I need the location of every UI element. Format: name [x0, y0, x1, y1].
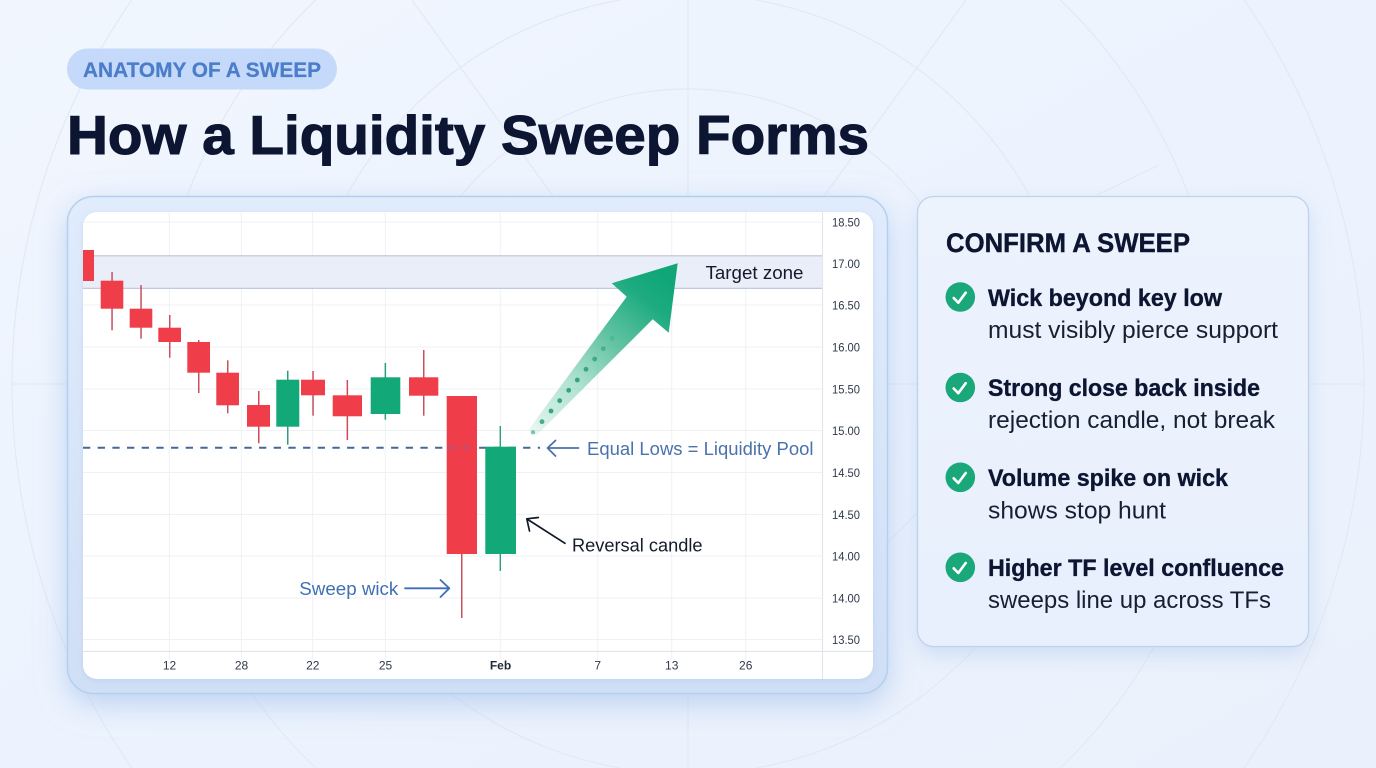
price axis labels: 18.50 [832, 215, 860, 229]
checklist item: volume spike on wick [946, 462, 1229, 524]
checklist item: strong close back inside [946, 373, 1276, 434]
date axis labels: Feb [490, 658, 511, 672]
label: target zone: Target zone [706, 262, 804, 283]
chart plot [83, 212, 873, 679]
checklist item: strong close back inside: Strong close back inside [988, 375, 1260, 402]
date axis labels: 7 [594, 658, 601, 672]
card frame [68, 196, 888, 694]
checklist item: higher TF level confluence [946, 552, 1284, 614]
arrow: projected move to target zone [528, 263, 678, 435]
price axis labels: 16.50 [832, 298, 860, 312]
price axis labels [832, 215, 860, 647]
checklist item: higher TF level confluence: sweeps line up across TFs [988, 587, 1271, 614]
callout: equal lows liquidity pool: Equal Lows = Liquidity Pool [587, 438, 814, 459]
date axis labels [163, 658, 753, 672]
panel background [918, 196, 1308, 646]
date axis labels: 12 [163, 658, 176, 672]
date axis labels: 28 [235, 658, 248, 672]
price axis labels: 13.50 [832, 633, 860, 647]
price axis labels: 14.50 [832, 508, 860, 522]
checklist item: volume spike on wick: shows stop hunt [988, 497, 1166, 524]
date axis labels: 25 [379, 658, 392, 672]
price axis labels: 14.00 [832, 549, 860, 563]
price axis labels: 14.50 [832, 466, 860, 480]
date axis labels: 22 [306, 658, 320, 672]
tag pill: anatomy of a sweep: ANATOMY OF A SWEEP [83, 59, 321, 82]
price axis labels: 16.00 [832, 340, 860, 354]
candlesticks [83, 250, 516, 618]
price axis labels: 15.00 [832, 424, 860, 438]
checklist item: strong close back inside: rejection candle, not break [988, 407, 1276, 434]
axis lines [83, 212, 873, 679]
checklist item: wick beyond key low: must visibly pierce support [988, 317, 1278, 344]
date axis labels: 13 [665, 658, 679, 672]
date axis labels: 26 [739, 658, 753, 672]
panel heading: CONFIRM A SWEEP [946, 228, 1190, 258]
price axis labels: 14.00 [832, 591, 860, 605]
price axis labels: 17.00 [832, 257, 860, 271]
checklist item: wick beyond key low [946, 282, 1278, 344]
tag pill: anatomy of a sweep [67, 48, 337, 90]
title: How a Liquidity Sweep Forms [67, 104, 869, 166]
chart surface [83, 212, 873, 679]
equal lows dashed line [83, 447, 540, 449]
checklist item: wick beyond key low: Wick beyond key low [988, 285, 1222, 312]
checklist item: volume spike on wick: Volume spike on wick [988, 465, 1229, 492]
price axis labels: 15.50 [832, 382, 860, 396]
callout: reversal candle: Reversal candle [572, 536, 702, 556]
target zone band [83, 256, 822, 288]
checklist item: higher TF level confluence: Higher TF level confluence [988, 555, 1284, 582]
callout: reversal candle [527, 518, 702, 556]
panel: confirm a sweep checklist [918, 196, 1308, 646]
callout: sweep wick [299, 578, 449, 599]
callout: sweep wick: Sweep wick [299, 578, 399, 599]
panel: candlestick chart card [68, 196, 888, 694]
